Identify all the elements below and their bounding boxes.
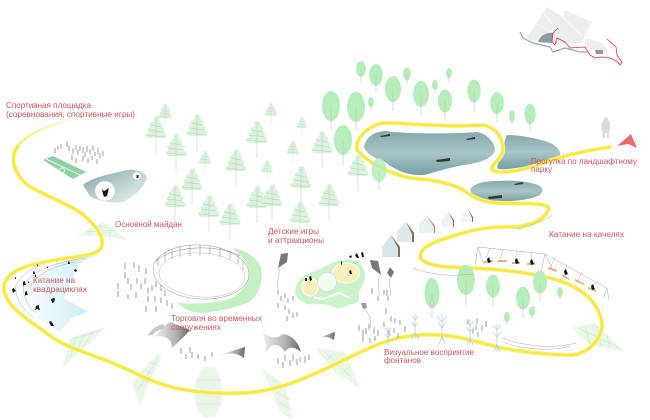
houses — [382, 209, 473, 257]
pine tree — [289, 201, 311, 238]
ticks near fountains — [468, 318, 486, 337]
pine tree — [164, 185, 186, 222]
house — [462, 209, 473, 222]
fountains — [385, 314, 501, 352]
green grid fans — [63, 222, 625, 420]
label: trade: Торговля во временных — [171, 313, 263, 323]
map: water bodies — [538, 33, 603, 54]
lake 2 — [497, 135, 560, 169]
yellow walking path — [4, 118, 610, 393]
square surface — [83, 170, 147, 203]
fan: oval — [194, 367, 222, 417]
kite — [277, 253, 288, 290]
red arrow marker — [617, 134, 637, 148]
yellow lobe right — [332, 263, 360, 283]
pine tree — [246, 121, 268, 158]
map: river — [520, 32, 587, 52]
canopies — [147, 322, 335, 358]
label: quad biking: квадрациклах — [33, 284, 88, 294]
pine tree — [198, 195, 220, 232]
swings — [475, 247, 609, 300]
label: sport ground: Спортивная площадка — [6, 100, 91, 110]
fan: lower left — [63, 327, 106, 367]
stall ticks near canopies and play area — [278, 288, 405, 368]
kite — [387, 267, 394, 296]
canopy — [147, 322, 190, 348]
label: trade: сооружениях — [171, 322, 222, 332]
canopy — [315, 332, 335, 340]
person statue — [601, 117, 610, 138]
swing frame — [475, 247, 609, 300]
lakes — [364, 131, 560, 202]
trading stalls — [118, 262, 212, 361]
fountain — [411, 314, 419, 339]
label: landscape park walk: парку — [531, 164, 553, 174]
label: sport ground: (соревнования, спортивные игры) — [6, 109, 135, 119]
small circle — [133, 172, 141, 180]
kites — [277, 253, 394, 328]
fan: middle — [262, 368, 293, 420]
label: children games: Детские игры — [268, 226, 319, 236]
label: children games: и аттракционы — [268, 235, 324, 245]
pine tree — [347, 154, 369, 191]
pine tree — [181, 168, 203, 205]
fountain — [437, 314, 447, 344]
canopy — [220, 347, 245, 358]
stadium / temporary structures ring — [151, 242, 262, 313]
label: main square: Основной майдан — [115, 219, 182, 229]
green ground — [295, 260, 365, 309]
thin park lines — [413, 215, 576, 349]
pine tree — [264, 103, 278, 125]
pine tree — [290, 166, 312, 203]
field surface — [43, 156, 86, 179]
dancer — [102, 188, 109, 197]
house — [442, 212, 454, 227]
lake 1 — [364, 131, 495, 175]
pine tree — [261, 184, 283, 221]
kite — [361, 303, 370, 328]
canopy — [263, 333, 301, 353]
quad bikes — [12, 261, 77, 326]
fan: far right — [572, 323, 625, 352]
pine tree — [186, 114, 208, 151]
path: main route — [4, 123, 610, 393]
field markings — [46, 159, 80, 175]
boats — [380, 134, 523, 199]
map: lower block — [585, 38, 608, 53]
ring frame — [155, 245, 243, 270]
central circle — [318, 272, 336, 292]
fountain — [493, 324, 501, 352]
pine tree — [158, 104, 172, 128]
pine tree — [225, 149, 247, 186]
quad track lines — [16, 253, 90, 318]
fan: right of middle — [315, 348, 360, 388]
locator map — [520, 7, 622, 65]
ring inner — [158, 250, 246, 300]
green surround — [178, 248, 262, 313]
path: edge glow — [4, 123, 610, 393]
performance circle — [95, 181, 115, 201]
house — [397, 222, 414, 242]
pine forest — [145, 103, 369, 240]
path: faded start — [18, 118, 85, 146]
fan: upper left — [76, 222, 128, 240]
pine tree — [261, 160, 273, 181]
figures — [305, 252, 364, 281]
map: roads — [537, 14, 582, 42]
pine tree — [165, 134, 187, 171]
deciduous trees — [322, 61, 563, 325]
pine tree — [198, 151, 212, 173]
main square: maidan — [83, 170, 147, 203]
pine tree — [318, 184, 340, 221]
blue quad-bike terrain — [20, 254, 98, 332]
house — [382, 235, 400, 257]
pine tree — [311, 131, 333, 168]
kite — [370, 260, 381, 296]
small figure — [136, 175, 138, 178]
map: city blocks — [527, 7, 592, 43]
white walkway — [314, 293, 350, 299]
swing riders — [487, 257, 595, 290]
fountain — [385, 327, 391, 344]
swing seats — [484, 260, 596, 292]
play island — [295, 252, 365, 309]
fountain — [466, 320, 474, 345]
ring outer — [151, 242, 251, 302]
yellow lobe left — [302, 278, 318, 296]
spectators at sport field — [55, 141, 103, 164]
pine tree — [219, 203, 241, 240]
pine tree — [246, 186, 268, 223]
pine tree — [145, 116, 167, 153]
map: red route — [552, 28, 622, 65]
lake 3 — [470, 181, 542, 202]
label: fountains: фонтанов — [384, 355, 421, 365]
sport field — [43, 156, 86, 179]
label: swings: Катание на качелях — [549, 229, 625, 239]
house — [419, 216, 435, 233]
fan: bottom — [132, 353, 162, 407]
label: landscape park walk: Прогулка по ландшафтному — [531, 156, 638, 166]
pine tree — [296, 117, 308, 136]
label: fountains: Визуальное восприятие — [384, 347, 474, 357]
pine tree — [286, 141, 300, 163]
label: quad biking: Катание на — [33, 275, 75, 285]
